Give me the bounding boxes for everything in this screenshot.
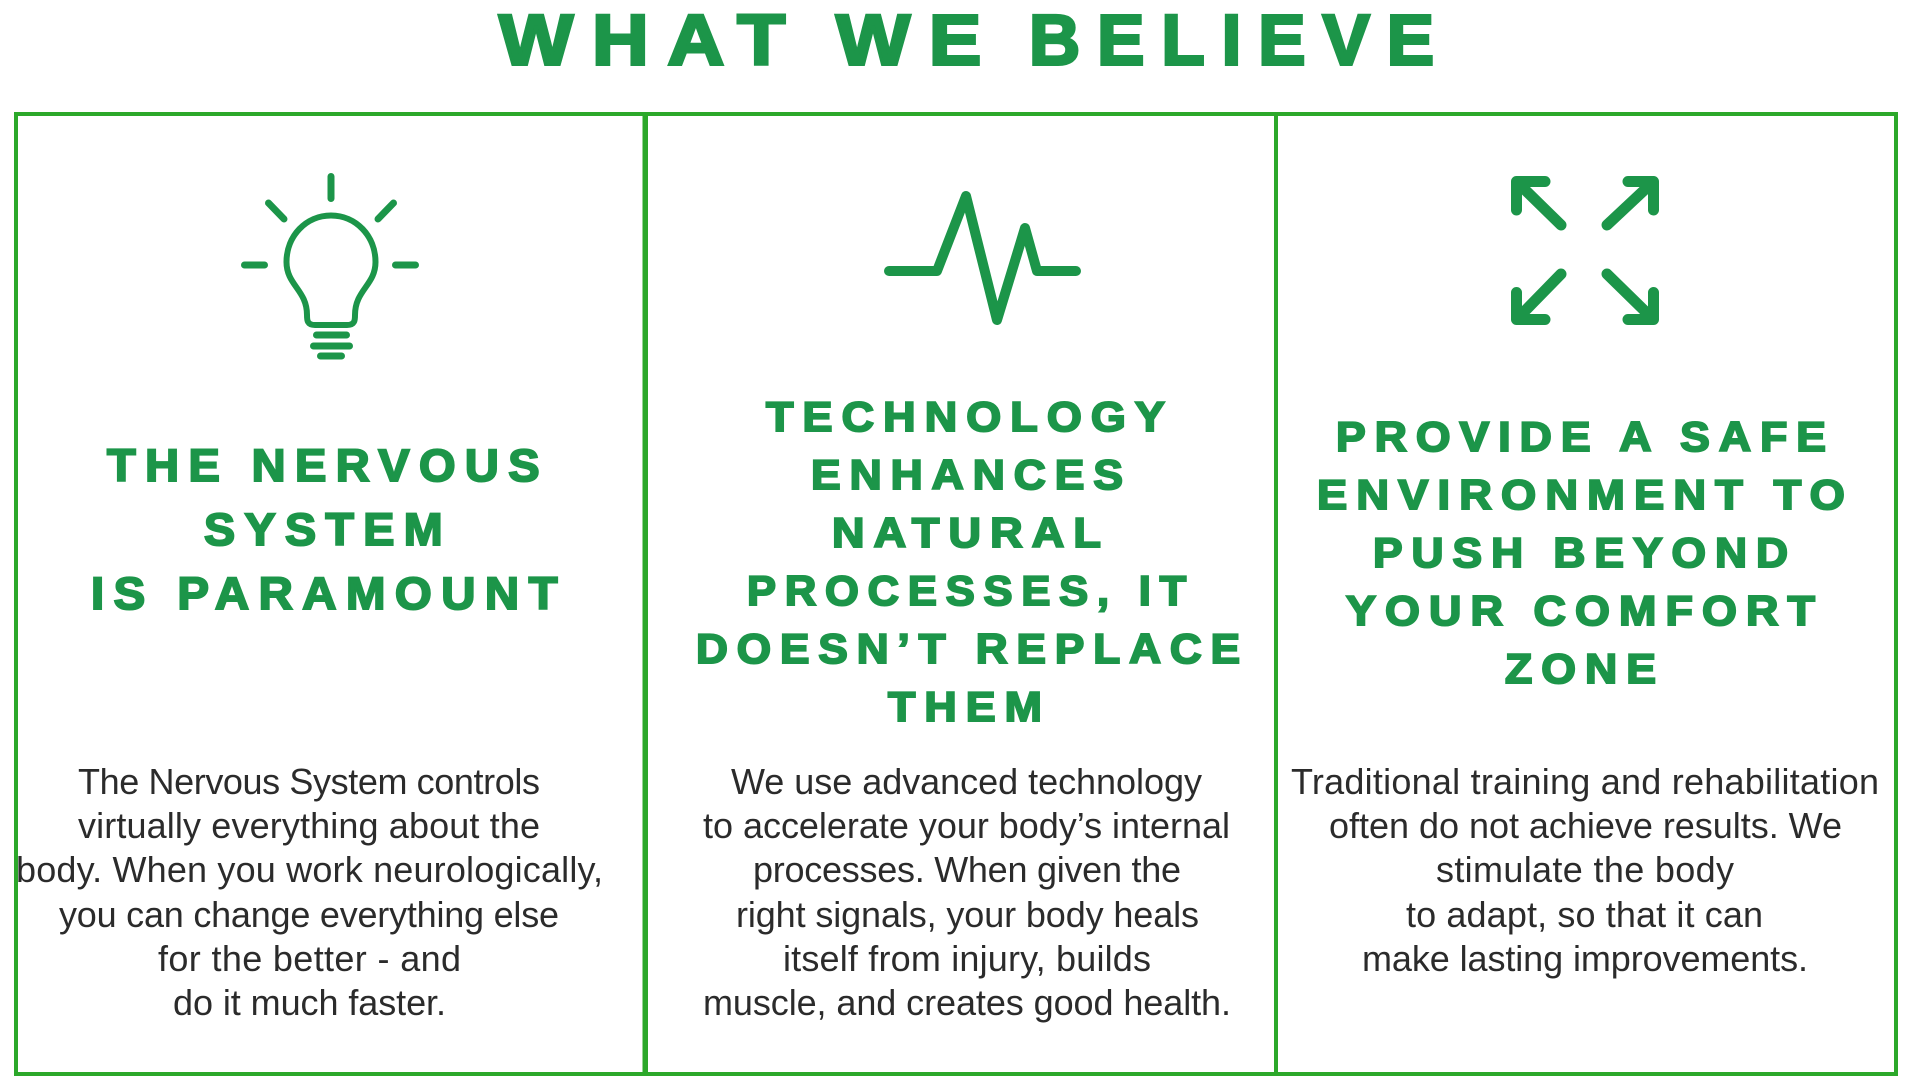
icon: light bulb [244, 176, 416, 356]
text block: training description [1291, 761, 1879, 979]
text block: technology description: itself from injury, builds [783, 938, 1151, 979]
text block: nervous system description: for the better - and [158, 938, 461, 979]
panel: the nervous system is paramount [16, 114, 644, 1074]
title: WHAT [499, 2, 804, 80]
text block: technology description: to accelerate your body’s internal [703, 805, 1230, 846]
heading: provide a safe environment: YOUR COMFORT [1346, 587, 1824, 634]
heading: provide a safe environment: ENVIRONMENT TO [1317, 471, 1854, 518]
heading: provide a safe environment [1317, 413, 1854, 692]
title: BELIEVE [1029, 2, 1451, 80]
heading: the nervous system is paramount: THE NERVOUS [107, 440, 549, 491]
heading: provide a safe environment: PUSH BEYOND [1373, 529, 1797, 576]
text block: training description: Traditional training and rehabilitation [1291, 761, 1879, 802]
text block: technology description: We use advanced technology [731, 761, 1202, 802]
text block: technology description: right signals, your body heals [736, 894, 1199, 935]
heading: technology enhances natural processes: NATURAL [832, 509, 1110, 556]
heading: the nervous system is paramount: SYSTEM [204, 504, 452, 555]
heading: technology enhances natural processes [696, 393, 1249, 730]
text block: nervous system description [16, 761, 603, 1023]
text block: nervous system description: do it much faster. [173, 982, 446, 1023]
heading: technology enhances natural processes: THEM [888, 683, 1051, 730]
heading: the nervous system is paramount: IS PARAMOUNT [91, 568, 567, 619]
text block: training description: to adapt, so that it can [1406, 894, 1763, 935]
text block: nervous system description: body. When you work neurologically, [16, 849, 603, 890]
title: WE [836, 2, 1000, 80]
text block: training description: make lasting improvements. [1362, 938, 1808, 979]
text block: technology description: processes. When given the [753, 849, 1181, 890]
text block: nervous system description: The Nervous System controls [78, 761, 540, 802]
text block: technology description: muscle, and creates good health. [703, 982, 1231, 1023]
heading: technology enhances natural processes: DOESN’T REPLACE [696, 625, 1249, 672]
heading: provide a safe environment: ZONE [1505, 645, 1665, 692]
text block: nervous system description: you can change everything else [59, 894, 559, 935]
text block: nervous system description: virtually everything about the [78, 805, 540, 846]
heading: provide a safe environment: PROVIDE A SAFE [1336, 413, 1835, 460]
text block: training description: stimulate the body [1436, 849, 1734, 890]
heading: technology enhances natural processes: TECHNOLOGY [766, 393, 1174, 440]
icon: pulse line [889, 196, 1076, 320]
text block: training description: often do not achieve results. We [1329, 805, 1842, 846]
text block: technology description [703, 761, 1231, 1023]
title [499, 2, 1451, 80]
panel: provide a safe environment [1276, 114, 1896, 1074]
heading: the nervous system is paramount [91, 440, 567, 619]
heading: technology enhances natural processes: ENHANCES [811, 451, 1132, 498]
icon: four outward arrows [1516, 182, 1654, 320]
heading: technology enhances natural processes: PROCESSES, IT [747, 567, 1195, 614]
panel: technology enhances natural processes [646, 114, 1276, 1074]
